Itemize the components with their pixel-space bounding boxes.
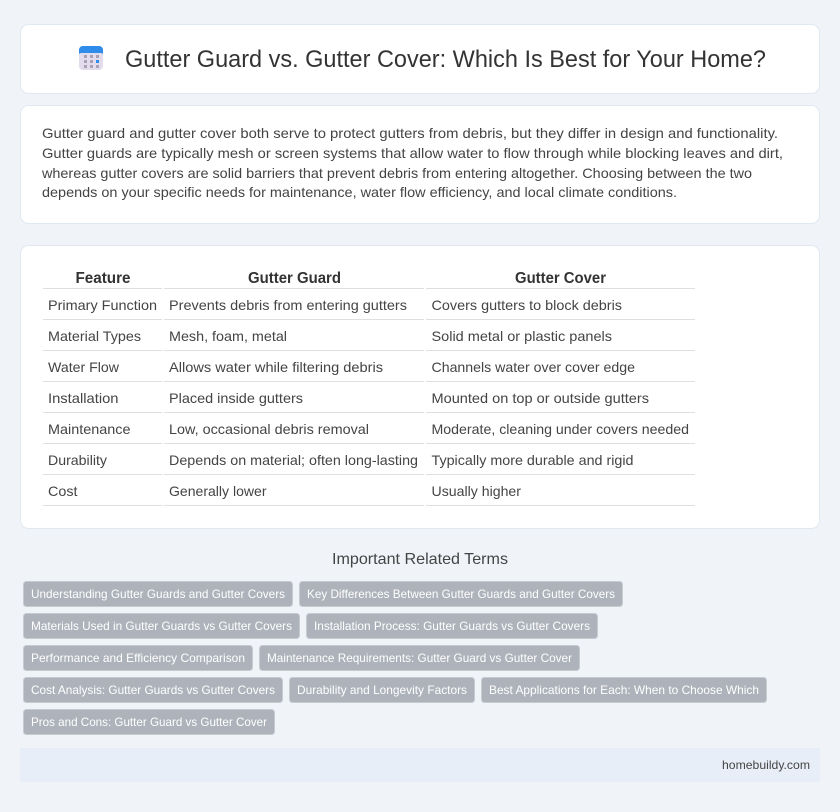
intro paragraph: depends on your specific needs for maintenance, water flow efficiency, and local climate conditions. bbox=[42, 184, 677, 200]
tag row 2: Materials Used in Gutter Guards vs Gutter Covers bbox=[31, 619, 292, 633]
table row: material types bbox=[43, 319, 695, 344]
tag row 3: Performance and Efficiency Comparison bbox=[31, 651, 245, 665]
table header row: Gutter Cover bbox=[515, 270, 606, 287]
intro paragraph: whereas gutter covers are solid barriers that prevent debris from entering altogether. Choosing between the two bbox=[41, 165, 752, 181]
table row: primary function bbox=[43, 288, 695, 313]
panel: introduction bbox=[20, 106, 820, 224]
table row: durability bbox=[43, 443, 695, 468]
tag row 3 bbox=[24, 646, 580, 670]
intro paragraph: Gutter guards are typically mesh or screen systems that allow water to flow through while blocking leaves and dirt, bbox=[42, 145, 783, 161]
table header row: Feature bbox=[76, 270, 131, 287]
table row: water flow: Channels water over cover edge bbox=[432, 359, 635, 375]
table row: water flow bbox=[43, 350, 695, 375]
table header row bbox=[76, 270, 606, 287]
table row: cost: Usually higher bbox=[432, 483, 521, 499]
tag row 5 bbox=[24, 710, 274, 734]
table row: maintenance: Moderate, cleaning under covers needed bbox=[432, 421, 689, 437]
footer bbox=[20, 748, 820, 782]
intro paragraph: Gutter guard and gutter cover both serve to protect gutters from debris, but they differ in design and functionality. bbox=[42, 125, 778, 141]
tag row 4 bbox=[24, 678, 766, 702]
table row: primary function: Covers gutters to block debris bbox=[432, 297, 622, 313]
header panel bbox=[20, 24, 820, 94]
footer site name: homebuildy.com bbox=[722, 758, 810, 772]
table row: cost: Cost bbox=[48, 483, 78, 499]
table row: installation: Mounted on top or outside gutters bbox=[432, 390, 649, 406]
tag row 2: Installation Process: Gutter Guards vs Gutter Covers bbox=[314, 619, 590, 633]
table row: water flow: Water Flow bbox=[48, 359, 120, 375]
related term tags bbox=[24, 582, 766, 734]
table row: water flow: Allows water while filtering debris bbox=[169, 359, 383, 375]
table row: primary function: Primary Function bbox=[48, 297, 157, 313]
table row: installation bbox=[43, 381, 695, 406]
heading: important related terms: Important Related Terms bbox=[332, 551, 508, 568]
title: Gutter Guard vs. Gutter Cover: Which Is Best for Your Home? bbox=[125, 46, 766, 73]
table row: installation: Installation bbox=[48, 390, 118, 406]
tag row 2 bbox=[24, 614, 598, 638]
tag row 1: Key Differences Between Gutter Guards and Gutter Covers bbox=[307, 587, 615, 601]
table header row: Gutter Guard bbox=[248, 270, 341, 287]
tag row 4: Cost Analysis: Gutter Guards vs Gutter Covers bbox=[31, 683, 275, 697]
table row: primary function: Prevents debris from entering gutters bbox=[169, 297, 407, 313]
table row: maintenance: Maintenance bbox=[48, 421, 131, 437]
table row: durability: Durability bbox=[48, 452, 107, 468]
table row: durability: Depends on material; often long-lasting bbox=[169, 452, 418, 468]
table row: maintenance: Low, occasional debris removal bbox=[169, 421, 369, 437]
intro paragraph bbox=[41, 125, 783, 200]
table row: material types: Material Types bbox=[48, 328, 141, 344]
table row: material types: Solid metal or plastic panels bbox=[432, 328, 612, 344]
table row: durability: Typically more durable and rigid bbox=[432, 452, 634, 468]
table row: maintenance bbox=[43, 412, 695, 437]
icon: calendar bbox=[79, 46, 103, 70]
table row: cost: Generally lower bbox=[169, 483, 267, 499]
tag row 1 bbox=[24, 582, 622, 606]
table row: installation: Placed inside gutters bbox=[169, 390, 303, 406]
table row: material types: Mesh, foam, metal bbox=[169, 328, 287, 344]
panel: comparison table bbox=[20, 246, 820, 528]
tag row 1: Understanding Gutter Guards and Gutter Covers bbox=[31, 587, 285, 601]
tag row 4: Durability and Longevity Factors bbox=[297, 683, 467, 697]
table row: cost bbox=[43, 474, 695, 506]
tag row 5: Pros and Cons: Gutter Guard vs Gutter Cover bbox=[31, 715, 267, 729]
tag row 4: Best Applications for Each: When to Choose Which bbox=[489, 683, 759, 697]
tag row 3: Maintenance Requirements: Gutter Guard vs Gutter Cover bbox=[267, 651, 572, 665]
